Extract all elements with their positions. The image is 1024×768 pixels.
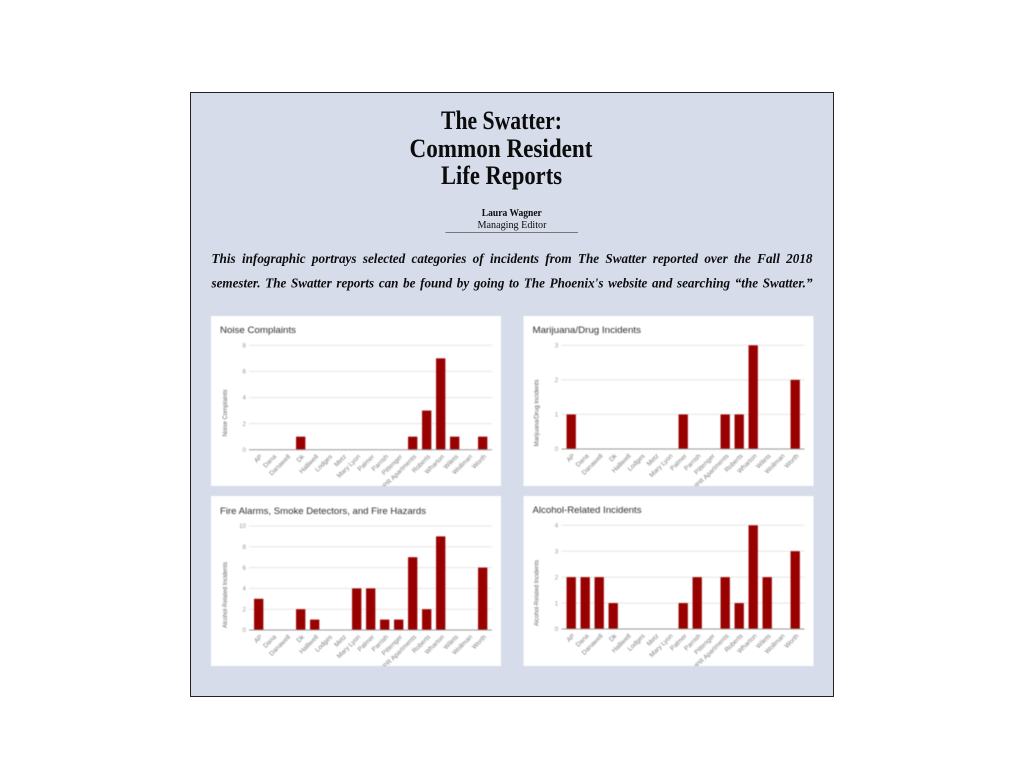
x axis labels xyxy=(566,632,801,672)
x axis labels: HPR Apartments xyxy=(379,633,419,673)
x axis labels: Wilets xyxy=(443,453,461,471)
x axis labels: Halliwell xyxy=(611,452,633,475)
x axis labels: Palmer xyxy=(669,632,689,652)
x axis labels: Mary Lyon xyxy=(648,452,675,479)
x axis labels: Danawell xyxy=(268,453,292,477)
y axis ticks: 10 xyxy=(239,523,247,530)
y axis ticks: 8 xyxy=(243,544,247,551)
x axis labels: Halliwell xyxy=(298,453,321,475)
y axis ticks xyxy=(555,522,559,633)
x axis labels: Parrish xyxy=(683,632,703,652)
byline xyxy=(446,208,578,232)
x axis labels: Dk xyxy=(296,453,307,464)
x axis labels: Wharton xyxy=(424,634,446,656)
x axis labels: Pittenger xyxy=(693,452,717,476)
x axis labels: Worth xyxy=(783,632,801,650)
x axis labels: Dk xyxy=(608,632,619,643)
y axis ticks: 4 xyxy=(243,395,247,402)
x axis labels: Dana xyxy=(575,632,591,649)
x axis labels: Wilets xyxy=(755,452,773,470)
x axis labels: Metz xyxy=(646,633,661,648)
bars xyxy=(296,358,487,450)
y axis ticks xyxy=(555,342,559,453)
x axis labels: Parrish xyxy=(371,633,390,653)
x axis labels: AP xyxy=(253,634,264,645)
x axis labels: Dk xyxy=(296,633,307,644)
x axis labels: HPR Apartments xyxy=(691,632,731,672)
x axis labels: Metz xyxy=(333,453,348,468)
x axis labels: Danawell xyxy=(581,632,605,657)
x axis labels: HPR Apartments xyxy=(379,453,419,493)
x axis labels: Metz xyxy=(333,634,348,649)
x axis labels: Roberts xyxy=(411,453,433,475)
x axis labels: AP xyxy=(566,453,577,464)
intro text: This infographic portrays selected categories of incidents from The Swatter reported over the Fall 2018 xyxy=(212,252,812,267)
x axis labels: Lodges xyxy=(314,453,335,473)
panel: fire alarms chart xyxy=(210,496,502,673)
x axis labels: Roberts xyxy=(411,633,433,655)
chart title: marijuana/drug incidents: Marijuana/Drug Incidents xyxy=(532,325,641,336)
y axis ticks: 4 xyxy=(555,522,559,530)
y axis ticks: 3 xyxy=(555,548,559,555)
x axis labels: Worth xyxy=(471,633,488,651)
y axis ticks: 3 xyxy=(555,342,559,350)
x axis labels: Dana xyxy=(575,452,591,469)
x axis labels: Mary Lyon xyxy=(336,633,362,660)
byline: Managing Editor xyxy=(478,220,547,231)
x axis labels: AP xyxy=(253,453,264,465)
y axis ticks: 0 xyxy=(243,627,247,634)
chart title: alcohol-related incidents: Alcohol-Related Incidents xyxy=(532,505,642,516)
y axis ticks: 2 xyxy=(243,606,247,613)
x axis labels: Pittenger xyxy=(693,632,717,656)
x axis labels: Mary Lyon xyxy=(336,453,362,480)
x axis labels: Parrish xyxy=(683,452,703,472)
y axis title: noise complaints: Noise Complaints xyxy=(223,390,229,436)
y axis ticks: 8 xyxy=(243,342,247,350)
panel: marijuana/drug incidents chart xyxy=(523,316,814,492)
chart title: fire alarms, smoke detectors, and fire hazards: Fire Alarms, Smoke Detectors, and Fire Hazards xyxy=(220,506,426,517)
y axis ticks: 1 xyxy=(555,600,559,607)
x axis labels: Metz xyxy=(646,453,661,468)
y axis ticks: 6 xyxy=(243,565,247,572)
x axis labels: Mary Lyon xyxy=(648,632,675,659)
x axis labels: Dk xyxy=(608,452,619,463)
y axis title: marijuana/drug incidents: Marijuana/Drug Incidents xyxy=(534,380,540,446)
bars xyxy=(567,525,800,629)
y axis ticks: 0 xyxy=(555,446,559,453)
x axis labels: Worth xyxy=(471,453,488,471)
title xyxy=(410,106,593,190)
x axis labels: Dana xyxy=(262,633,278,650)
title: The Swatter: xyxy=(441,106,562,135)
x axis labels: Dana xyxy=(262,453,278,469)
x axis labels: Lodges xyxy=(627,452,647,473)
x axis labels: Halliwell xyxy=(611,632,633,655)
intro text xyxy=(211,252,812,292)
x axis labels: Roberts xyxy=(724,452,745,474)
y axis ticks: 6 xyxy=(243,369,247,376)
x axis labels: AP xyxy=(566,633,577,644)
x axis labels: Wollman xyxy=(451,453,474,476)
x axis labels xyxy=(253,453,488,493)
x axis labels: Wollman xyxy=(451,633,474,657)
title: Life Reports xyxy=(441,161,562,190)
x axis labels: Wharton xyxy=(736,633,759,655)
x axis labels: Wollman xyxy=(764,632,787,656)
x axis labels: Parrish xyxy=(371,453,390,473)
y axis ticks xyxy=(239,523,247,634)
x axis labels: Wilets xyxy=(755,632,773,650)
chart title: noise complaints: Noise Complaints xyxy=(220,325,296,336)
x axis labels: Palmer xyxy=(357,453,377,473)
background panel xyxy=(190,92,834,696)
y axis ticks: 0 xyxy=(243,447,247,454)
byline: Laura Wagner xyxy=(482,208,542,219)
x axis labels: HPR Apartments xyxy=(691,452,731,492)
y axis ticks: 4 xyxy=(243,586,247,593)
x axis labels: Roberts xyxy=(724,632,745,654)
x axis labels xyxy=(566,452,801,492)
y axis ticks xyxy=(243,342,247,454)
x axis labels: Danawell xyxy=(581,452,605,477)
x axis labels: Lodges xyxy=(314,633,335,654)
x axis labels: Wharton xyxy=(736,453,759,475)
x axis labels: Palmer xyxy=(357,633,377,653)
x axis labels: Wollman xyxy=(764,452,787,476)
intro text: semester. The Swatter reports can be found by going to The Phoenix's website and searching “the Swatter.” xyxy=(211,276,812,292)
x axis labels xyxy=(253,633,488,673)
y axis title: alcohol-related incidents: Alcohol-Related Incidents xyxy=(534,560,540,626)
x axis labels: Wilets xyxy=(443,633,461,651)
x axis labels: Lodges xyxy=(627,632,647,653)
title: Common Resident xyxy=(410,134,593,163)
y axis ticks: 1 xyxy=(555,412,559,419)
y axis ticks: 2 xyxy=(243,421,247,428)
x axis labels: Worth xyxy=(783,452,801,470)
y axis title: alcohol-related incidents: Alcohol-Related Incidents xyxy=(223,562,229,628)
panel: alcohol-related incidents chart xyxy=(523,496,814,672)
bars xyxy=(254,536,487,630)
x axis labels: Halliwell xyxy=(298,633,321,656)
panel: noise complaints chart xyxy=(210,316,502,493)
x axis labels: Pittenger xyxy=(381,633,405,657)
y axis ticks: 0 xyxy=(555,626,559,633)
x axis labels: Danawell xyxy=(268,633,292,658)
x axis labels: Pittenger xyxy=(381,453,405,477)
y axis ticks: 2 xyxy=(555,377,559,384)
x axis labels: Wharton xyxy=(424,453,446,476)
x axis labels: Palmer xyxy=(669,452,689,472)
bars xyxy=(567,345,800,449)
y axis ticks: 2 xyxy=(555,574,559,581)
